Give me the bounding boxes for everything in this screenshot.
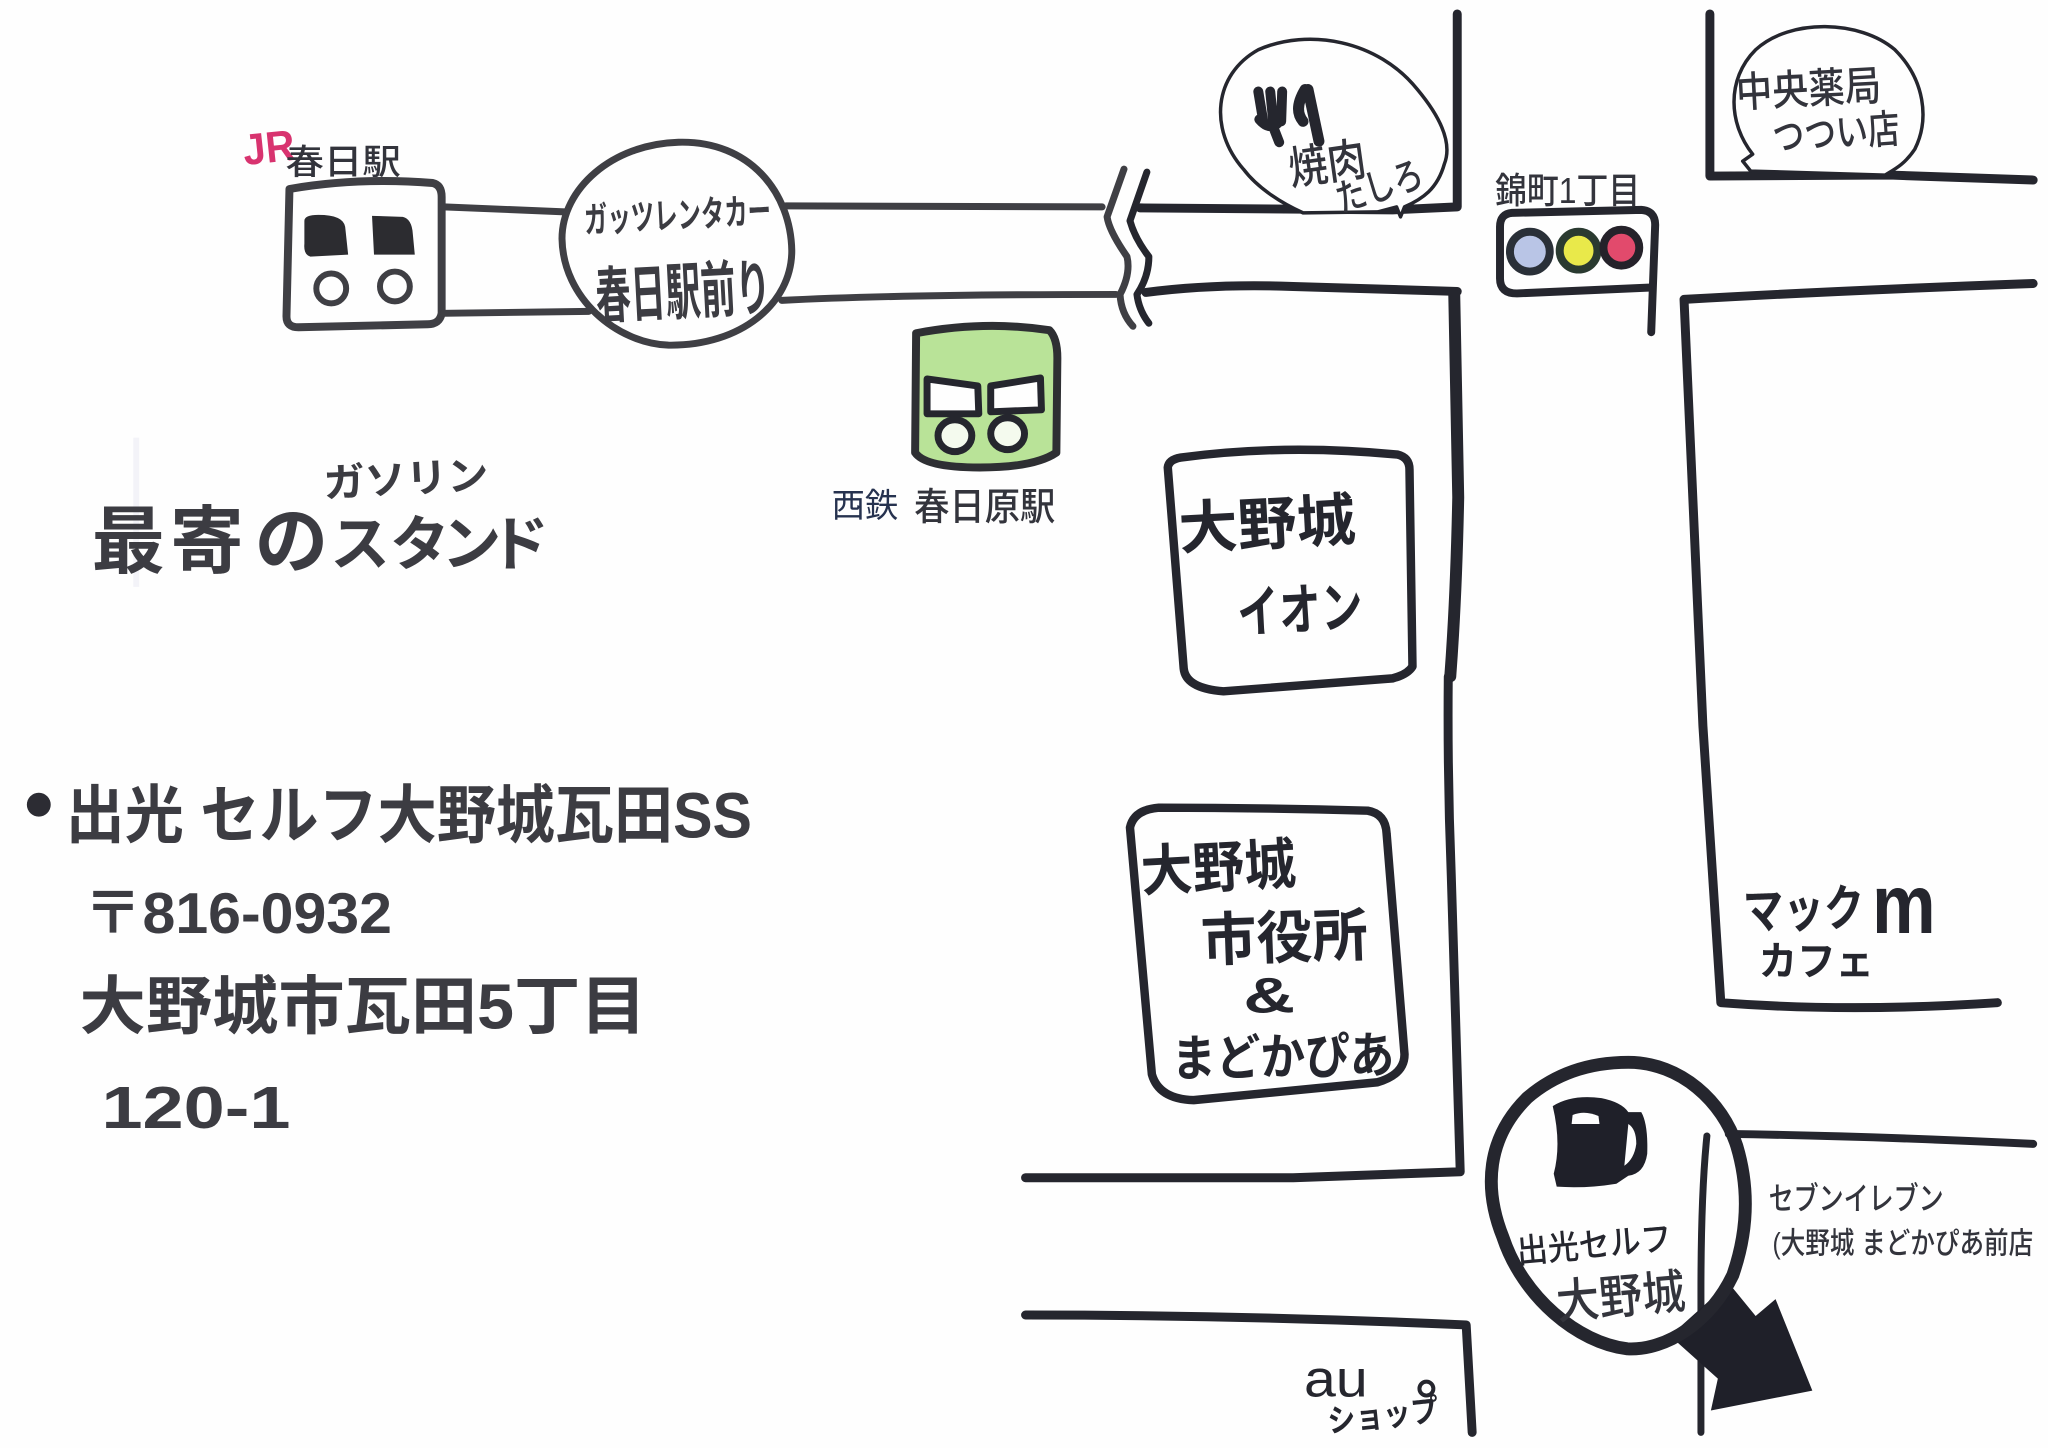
Nishitetsu Kasugabaru station: [832, 326, 1057, 529]
label: city hall: 市役所: [1200, 904, 1369, 974]
JR Kasuga station: [241, 121, 442, 327]
road: left section: [444, 206, 1116, 313]
text: station name: 出光 セルフ大野城瓦田SS: [66, 781, 752, 852]
callout: Idemitsu gas station: [1491, 1062, 1745, 1349]
icon: train front: [286, 181, 442, 327]
text: block number: 120-1: [101, 1074, 290, 1141]
label: Idemitsu Self: 出光セルフ: [1515, 1220, 1673, 1271]
label: station name: 春日駅: [285, 143, 401, 182]
road break symbol: [1107, 169, 1149, 326]
label: au shop: ショップ: [1326, 1392, 1441, 1439]
traffic light: Nishikimachi 1-chome: [1495, 171, 1655, 332]
label: street name: 春日駅前り: [594, 254, 772, 332]
address block: [27, 781, 752, 1141]
building: Onojo city hall and Madokapia: [1130, 808, 1405, 1100]
text: address: 大野城市瓦田5丁目: [80, 972, 647, 1043]
block outlines: main roads: [1026, 14, 2033, 1432]
label: Kasugabaru station: 春日原駅: [914, 487, 1055, 529]
label: ampersand: &: [1243, 968, 1295, 1024]
label: Onojo: 大野城: [1139, 833, 1298, 903]
road: east of gas station: [1729, 1134, 2033, 1144]
label: yakiniku: 焼肉: [1285, 134, 1369, 195]
icon: fork and knife: [1258, 90, 1319, 142]
label: Tsutsui branch: つつい店: [1771, 107, 1901, 160]
label: Mac cafe: m: [1872, 857, 1936, 951]
label: Tashiro: たしろ: [1331, 154, 1429, 221]
icon: fuel pump: [1553, 1097, 1647, 1187]
heading: nearest gas station: [92, 454, 549, 583]
title: スタンド: [330, 511, 549, 578]
label: Onojo: 大野城: [1177, 489, 1357, 562]
label: Aeon: イオン: [1236, 576, 1364, 645]
label: Onojo: 大野城: [1554, 1266, 1687, 1330]
label: au shop: [1304, 1350, 1441, 1439]
label: Madokapia: まどかぴあ: [1171, 1027, 1395, 1087]
label: Mac cafe: カフェ: [1759, 940, 1874, 984]
label: Nishitetsu: 西鉄: [832, 487, 898, 525]
icon: signal: [1500, 210, 1655, 332]
icon: bullet: [27, 793, 51, 817]
label: Mac cafe: マック: [1742, 880, 1865, 940]
label: Mac cafe: [1742, 857, 1936, 984]
label: rental car: ガッツレンタカー: [583, 191, 772, 241]
callout: Chuo pharmacy: [1734, 27, 1923, 175]
icon: green train front: [915, 326, 1057, 468]
label: intersection name: 錦町1丁目: [1495, 171, 1640, 211]
text: postal code: 〒816-0932: [84, 882, 392, 946]
label: JR: JR: [241, 121, 297, 175]
label: au shop: au: [1304, 1350, 1368, 1408]
label: gasoline furigana: ガソリン: [322, 454, 490, 506]
callout: yakiniku Tashiro: [1221, 39, 1447, 221]
label: Chuo pharmacy: 中央薬局: [1735, 62, 1882, 116]
arrow: to the gas station: [1670, 1283, 1812, 1410]
label: Seven-Eleven: [1769, 1181, 2033, 1260]
building: Aeon: [1168, 450, 1412, 691]
road: thin vertical: [1701, 1136, 1707, 1432]
callout: rental car shop: [562, 142, 792, 345]
title: 最寄の: [92, 500, 328, 583]
label: Seven-Eleven: セブンイレブン: [1769, 1181, 1944, 1217]
